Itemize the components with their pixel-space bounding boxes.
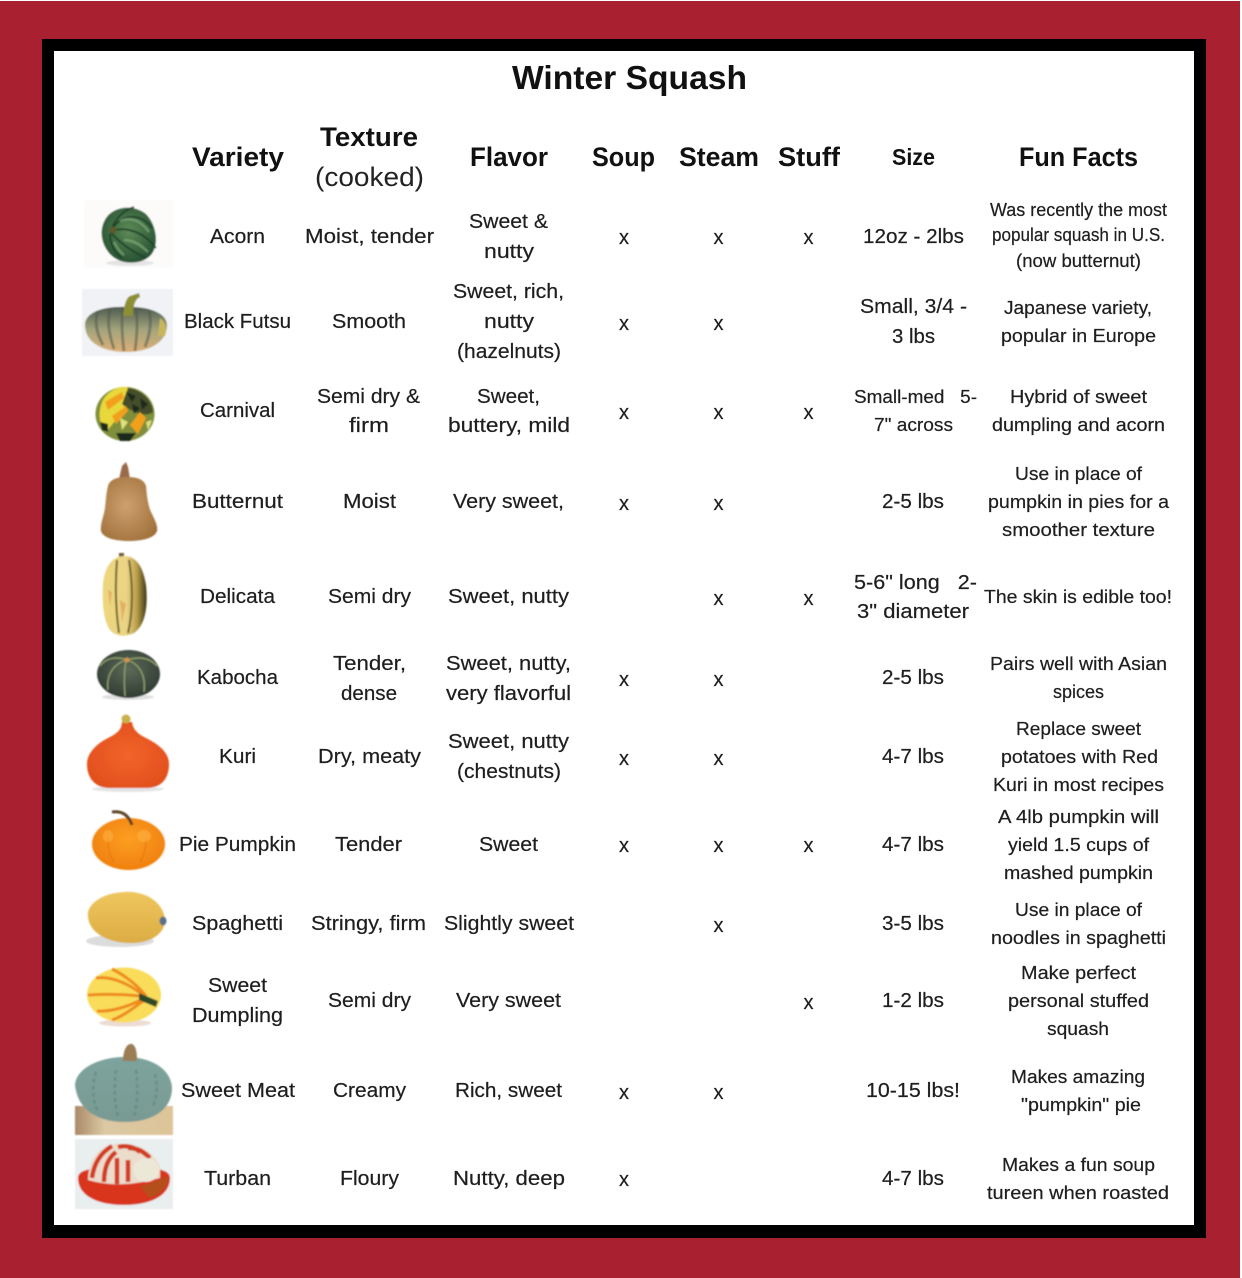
fun fact: popular squash in U.S. — [992, 225, 1165, 245]
header: size: Size — [892, 144, 935, 170]
row: turban — [75, 1139, 1169, 1209]
fun fact: personal stuffed — [1008, 991, 1149, 1011]
row: black futsu — [82, 281, 1156, 363]
flavor: Sweet, nutty — [448, 586, 569, 608]
row: sweet meat — [75, 1044, 1145, 1135]
flavor — [453, 281, 564, 363]
texture: Stringy, firm — [311, 913, 426, 935]
row: sweet dumpling — [87, 963, 1149, 1039]
fun fact: popular in Europe — [1001, 326, 1156, 346]
fun fact: Japanese variety, — [1004, 298, 1152, 318]
fun fact: Hybrid of sweet — [1010, 387, 1147, 407]
flavor: Sweet & — [469, 211, 549, 233]
texture: Tender — [335, 834, 402, 856]
texture: Moist — [343, 491, 396, 513]
uses — [619, 669, 724, 691]
flavor: Very sweet — [456, 990, 561, 1012]
texture: firm — [349, 415, 389, 437]
icon: butternut squash — [101, 462, 157, 541]
fun fact: tureen when roasted — [987, 1183, 1169, 1203]
row: acorn — [84, 200, 1167, 271]
flavor: nutty — [484, 311, 534, 333]
size — [854, 572, 977, 623]
size: 4-7 lbs — [882, 834, 944, 856]
fun fact: Make perfect — [1021, 963, 1136, 983]
fun fact — [998, 807, 1159, 883]
size: 12oz - 2lbs — [863, 226, 964, 248]
uses — [619, 402, 814, 424]
uses — [619, 313, 724, 335]
size: 3" diameter — [857, 601, 969, 623]
texture: Semi dry — [328, 586, 411, 608]
uses: x — [619, 313, 629, 335]
flavor: nutty — [484, 241, 534, 263]
fun fact — [1008, 963, 1149, 1039]
size — [854, 387, 977, 435]
texture: Tender, — [333, 653, 406, 675]
header: variety: Variety — [192, 142, 284, 172]
uses: x — [619, 493, 629, 515]
uses: x — [619, 227, 629, 249]
uses — [619, 835, 814, 857]
uses — [619, 493, 724, 515]
variety — [192, 975, 283, 1027]
icon: kabocha squash — [97, 650, 160, 700]
flavor — [448, 386, 570, 437]
fun fact: Replace sweet — [1016, 719, 1141, 739]
size: Small-med 5- — [854, 387, 977, 407]
uses: x — [619, 1169, 629, 1191]
variety: Delicata — [200, 586, 276, 608]
uses: x — [804, 992, 814, 1014]
icon: kuri squash — [87, 714, 169, 792]
variety: Butternut — [192, 491, 283, 513]
fun fact — [1011, 1067, 1145, 1115]
uses: x — [714, 588, 724, 610]
fun fact: Makes a fun soup — [1002, 1155, 1155, 1175]
texture: Moist, tender — [305, 226, 434, 248]
variety: Acorn — [210, 226, 265, 248]
fun fact: pumpkin in pies for a — [988, 492, 1170, 512]
uses: x — [804, 588, 814, 610]
texture: Smooth — [332, 311, 406, 333]
uses: x — [619, 1082, 629, 1104]
variety: Turban — [204, 1168, 271, 1190]
uses: x — [714, 835, 724, 857]
flavor: Sweet, — [477, 386, 540, 408]
fun fact: (now butternut) — [1016, 251, 1141, 271]
flavor: Rich, sweet — [455, 1080, 562, 1102]
fun fact: Was recently the most — [990, 200, 1167, 220]
title: Winter Squash — [512, 59, 747, 96]
icon: delicata squash — [103, 553, 147, 636]
size: 3 lbs — [892, 326, 935, 348]
uses: x — [804, 835, 814, 857]
size: 5-6" long 2- — [854, 572, 977, 594]
fun fact: Kuri in most recipes — [993, 775, 1164, 795]
icon: sweet dumpling squash — [87, 968, 161, 1026]
flavor: (chestnuts) — [457, 761, 561, 783]
fun fact — [1001, 298, 1156, 346]
texture: Semi dry & — [317, 386, 421, 408]
flavor: Sweet, nutty — [448, 731, 569, 753]
flavor — [469, 211, 549, 263]
header: steam: Steam — [679, 142, 759, 172]
size: 7" across — [874, 415, 953, 435]
fun fact — [991, 900, 1166, 948]
size: 10-15 lbs! — [866, 1080, 960, 1102]
uses: x — [714, 493, 724, 515]
uses — [619, 227, 814, 249]
header: stuff: Stuff — [778, 142, 841, 172]
fun fact: Pairs well with Asian — [990, 654, 1167, 674]
icon: carnival squash — [96, 387, 154, 441]
texture: Creamy — [333, 1080, 406, 1102]
uses — [714, 588, 814, 610]
variety: Sweet Meat — [181, 1080, 295, 1102]
flavor: Nutty, deep — [453, 1168, 565, 1190]
fun fact: mashed pumpkin — [1004, 863, 1153, 883]
uses — [619, 748, 724, 770]
fun fact — [988, 464, 1170, 540]
row: kabocha — [97, 650, 1167, 705]
uses: x — [619, 669, 629, 691]
size: 2-5 lbs — [882, 667, 944, 689]
size: 3-5 lbs — [882, 913, 944, 935]
uses: x — [619, 402, 629, 424]
fun fact: spices — [1053, 682, 1104, 702]
texture: dense — [341, 683, 397, 705]
flavor — [446, 653, 571, 705]
uses: x — [714, 1082, 724, 1104]
uses: x — [714, 402, 724, 424]
fun fact: Use in place of — [1015, 464, 1143, 484]
row: butternut — [101, 462, 1170, 541]
header: fun facts: Fun Facts — [1019, 142, 1138, 172]
variety: Sweet — [208, 975, 267, 997]
icon: acorn squash — [84, 200, 173, 268]
flavor: buttery, mild — [448, 415, 570, 437]
fun fact: smoother texture — [1002, 520, 1155, 540]
uses: x — [714, 915, 724, 937]
header: texture (cooked) — [315, 122, 424, 192]
size: 4-7 lbs — [882, 1168, 944, 1190]
header: soup: Soup — [592, 142, 655, 172]
fun fact: potatoes with Red — [1001, 747, 1158, 767]
flavor: Very sweet, — [453, 491, 564, 513]
icon: sweet meat squash — [75, 1044, 173, 1135]
uses — [619, 1082, 724, 1104]
uses: x — [804, 227, 814, 249]
flavor: Sweet — [479, 834, 538, 856]
variety: Dumpling — [192, 1005, 283, 1027]
fun fact — [990, 200, 1167, 271]
flavor: Sweet, rich, — [453, 281, 564, 303]
texture: Semi dry — [328, 990, 411, 1012]
variety: Kabocha — [197, 667, 279, 689]
header: flavor: Flavor — [470, 142, 548, 172]
uses: x — [619, 835, 629, 857]
fun fact — [990, 654, 1167, 702]
flavor: (hazelnuts) — [457, 341, 561, 363]
texture: Floury — [340, 1168, 399, 1190]
texture — [333, 653, 406, 705]
fun fact: yield 1.5 cups of — [1008, 835, 1150, 855]
fun fact: dumpling and acorn — [992, 415, 1165, 435]
uses: x — [714, 669, 724, 691]
size: 2-5 lbs — [882, 491, 944, 513]
fun fact — [993, 719, 1164, 795]
fun fact: Use in place of — [1015, 900, 1143, 920]
size: Small, 3/4 - — [860, 296, 967, 318]
icon: black futsu squash — [82, 289, 173, 356]
row: kuri — [87, 714, 1164, 795]
icon: spaghetti squash — [86, 892, 166, 947]
flavor — [448, 731, 569, 783]
fun fact — [992, 387, 1165, 435]
uses: x — [714, 313, 724, 335]
variety: Spaghetti — [192, 913, 283, 935]
icon: pie pumpkin — [92, 812, 165, 870]
row: spaghetti — [86, 892, 1166, 948]
size — [860, 296, 967, 348]
fun fact: Makes amazing — [1011, 1067, 1145, 1087]
variety: Pie Pumpkin — [179, 834, 296, 856]
size: 4-7 lbs — [882, 746, 944, 768]
fun fact: squash — [1047, 1019, 1109, 1039]
header: texture (cooked): Texture — [320, 122, 418, 152]
header: texture (cooked): (cooked) — [315, 162, 424, 192]
flavor: very flavorful — [446, 683, 571, 705]
fun fact: "pumpkin" pie — [1021, 1095, 1141, 1115]
uses: x — [804, 402, 814, 424]
flavor: Slightly sweet — [444, 913, 574, 935]
row: pie pumpkin — [92, 807, 1159, 883]
size: 1-2 lbs — [882, 990, 944, 1012]
uses: x — [714, 748, 724, 770]
variety: Kuri — [219, 746, 256, 768]
fun fact: The skin is edible too! — [984, 587, 1172, 607]
variety: Carnival — [200, 400, 275, 422]
fun fact — [987, 1155, 1169, 1203]
variety: Black Futsu — [184, 311, 291, 333]
fun fact: A 4lb pumpkin will — [998, 807, 1159, 827]
fun fact: noodles in spaghetti — [991, 928, 1166, 948]
texture — [317, 386, 421, 437]
flavor: Sweet, nutty, — [446, 653, 571, 675]
row: delicata — [103, 553, 1172, 636]
texture: Dry, meaty — [318, 746, 421, 768]
uses: x — [619, 748, 629, 770]
uses: x — [714, 227, 724, 249]
row: carnival — [96, 386, 1165, 441]
icon: turban squash — [75, 1139, 173, 1209]
table header row — [192, 122, 1138, 192]
